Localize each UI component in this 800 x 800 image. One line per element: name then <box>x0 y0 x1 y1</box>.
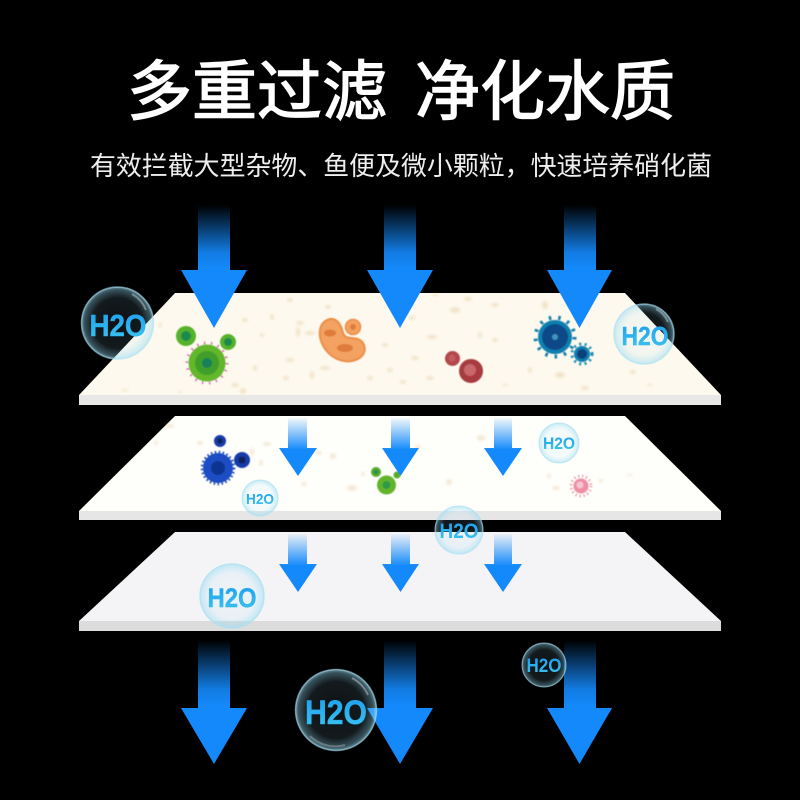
arrow: layer 2 centre <box>382 418 419 476</box>
arrow: layer 3 right <box>484 534 522 592</box>
arrow: top left <box>181 205 247 328</box>
icon: green virus cluster <box>176 326 236 383</box>
panel: filter layer 2 <box>79 416 721 520</box>
layer 3 top surface <box>79 532 721 621</box>
bubble: H2O layer 2 left: H2O <box>246 491 274 508</box>
layer 3 front edge <box>79 621 721 631</box>
bubble: H2O layer 2 left <box>242 480 278 516</box>
arrows: small on layer 3 <box>279 534 522 592</box>
bubble: H2O upper right: H2O <box>622 321 668 351</box>
layer 1 front edge <box>79 395 721 405</box>
bubble: H2O bottom small: H2O <box>526 656 562 677</box>
arrow: layer 3 left <box>279 534 317 592</box>
panel: filter layer 1 <box>79 293 721 405</box>
bubble: H2O upper left <box>82 287 154 359</box>
bubble: H2O bottom large <box>296 670 376 750</box>
arrow: layer 2 left <box>279 418 317 476</box>
layer 2 front edge <box>79 511 721 520</box>
icon: red cells <box>445 351 483 383</box>
layer 1 top surface <box>79 293 721 395</box>
icon: teal blue virus cluster <box>536 318 592 364</box>
title: 净化水质 <box>415 55 675 128</box>
bubble: H2O layer 2 right: H2O <box>543 434 575 453</box>
layer 2 top surface <box>79 416 721 511</box>
arrow: bottom right <box>547 640 612 764</box>
layer 1 debris speckles <box>122 294 653 394</box>
arrows: small on layer 2 <box>279 418 522 476</box>
arrow: top right <box>547 205 612 328</box>
bubble: H2O layer 2 right <box>539 423 579 463</box>
bubble: H2O layer 3 <box>200 564 264 628</box>
subtitle: 有效拦截大型杂物、鱼便及微小颗粒，快速培养硝化菌 <box>90 151 712 181</box>
bubble: H2O layer 3: H2O <box>208 583 256 613</box>
arrow: top centre <box>367 205 433 328</box>
arrows: large top row <box>181 205 612 328</box>
arrow: bottom centre <box>367 640 433 764</box>
title: 多重过滤 <box>127 55 387 128</box>
icon: small green virus cluster <box>371 467 400 494</box>
arrows: large bottom row <box>181 640 612 764</box>
arrow: layer 2 right <box>484 418 522 476</box>
icon: blue virus cluster <box>202 435 250 484</box>
title <box>127 55 675 128</box>
bubble: H2O between layers <box>435 506 483 554</box>
bubble: H2O bottom small <box>522 643 566 687</box>
bubble: H2O upper right <box>614 304 674 364</box>
icon: orange mitochondrion bacterium <box>320 319 365 361</box>
bubble: H2O bottom large: H2O <box>305 694 367 732</box>
bubble: H2O between layers: H2O <box>440 520 478 543</box>
panel: filter layer 3 <box>79 532 721 631</box>
bubble: H2O upper left: H2O <box>90 308 146 343</box>
layer 2 debris speckles <box>154 424 633 491</box>
arrow: bottom left <box>181 640 247 764</box>
icon: pink germ <box>571 476 591 496</box>
arrow: layer 3 centre <box>382 534 419 592</box>
